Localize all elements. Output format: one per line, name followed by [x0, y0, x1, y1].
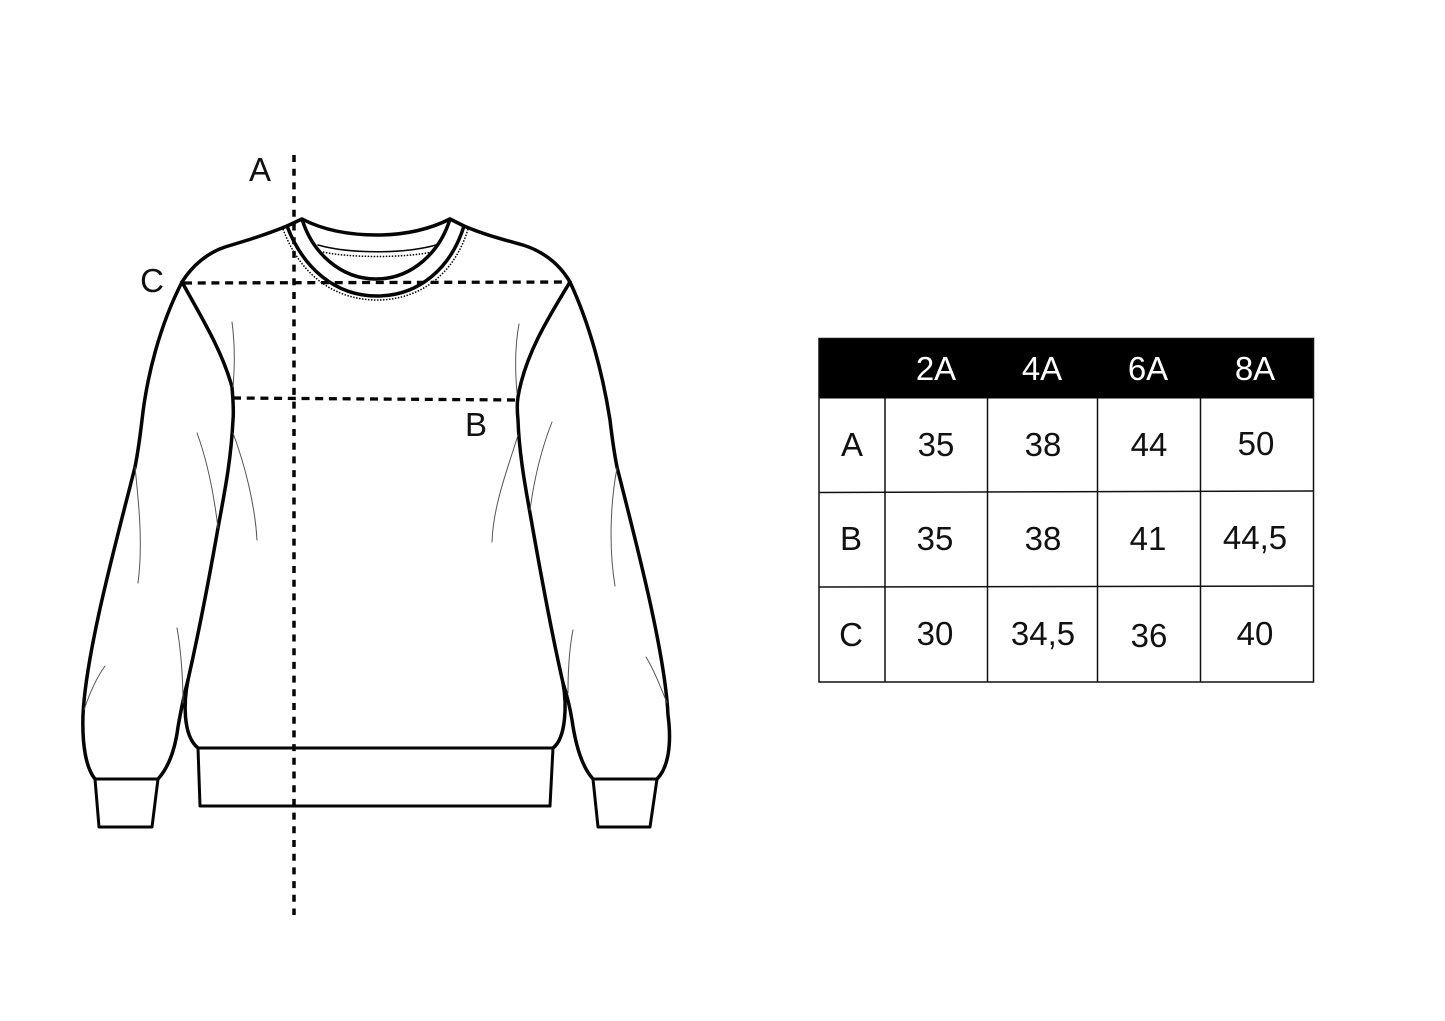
neck and shoulders — [182, 219, 570, 282]
collar stitching — [283, 229, 468, 300]
label A: A — [249, 151, 271, 188]
header labels: 8A — [1235, 350, 1275, 387]
table grid — [819, 338, 1314, 682]
right sleeve outer edge — [570, 282, 670, 779]
row A: 44 — [1131, 426, 1167, 463]
header labels: 6A — [1128, 350, 1168, 387]
right cuff — [593, 779, 657, 827]
row B: 38 — [1025, 520, 1061, 557]
left sleeve outer edge — [83, 282, 182, 779]
row C: 40 — [1237, 615, 1273, 652]
row A: 38 — [1025, 426, 1061, 463]
row B: B — [840, 520, 862, 557]
inner shirt neckline — [318, 245, 436, 252]
row C: 34,5 — [1011, 615, 1075, 652]
header labels — [916, 350, 1275, 387]
sweatshirt line drawing — [83, 219, 670, 827]
header labels: 2A — [916, 350, 956, 387]
row A: 50 — [1238, 425, 1274, 462]
row B: 44,5 — [1223, 519, 1287, 556]
label B: B — [465, 406, 487, 443]
measurement line C — [184, 282, 569, 283]
table header background — [818, 338, 1314, 398]
row C: 30 — [917, 615, 953, 652]
row A: A — [841, 426, 863, 463]
right hem join — [553, 683, 565, 748]
left hem join — [185, 680, 198, 748]
row C: C — [839, 616, 863, 653]
row B: 41 — [1130, 520, 1166, 557]
left armhole and side seam — [158, 282, 233, 779]
right armhole and side seam — [517, 282, 593, 779]
measurement line A — [292, 155, 296, 915]
size table — [818, 338, 1314, 682]
row A — [841, 425, 1274, 463]
row C: 36 — [1131, 617, 1167, 654]
inner shirt stitching — [323, 252, 432, 256]
fabric wrinkles — [84, 322, 667, 710]
left cuff — [95, 779, 158, 827]
inner collar — [302, 219, 450, 279]
row C — [839, 615, 1273, 654]
header labels: 4A — [1022, 350, 1062, 387]
row A: 35 — [918, 426, 954, 463]
measurement line B — [233, 398, 518, 400]
row B: 35 — [917, 520, 953, 557]
waistband — [198, 748, 553, 806]
outer collar — [287, 226, 464, 296]
row B — [840, 519, 1287, 557]
label C: C — [140, 262, 164, 299]
